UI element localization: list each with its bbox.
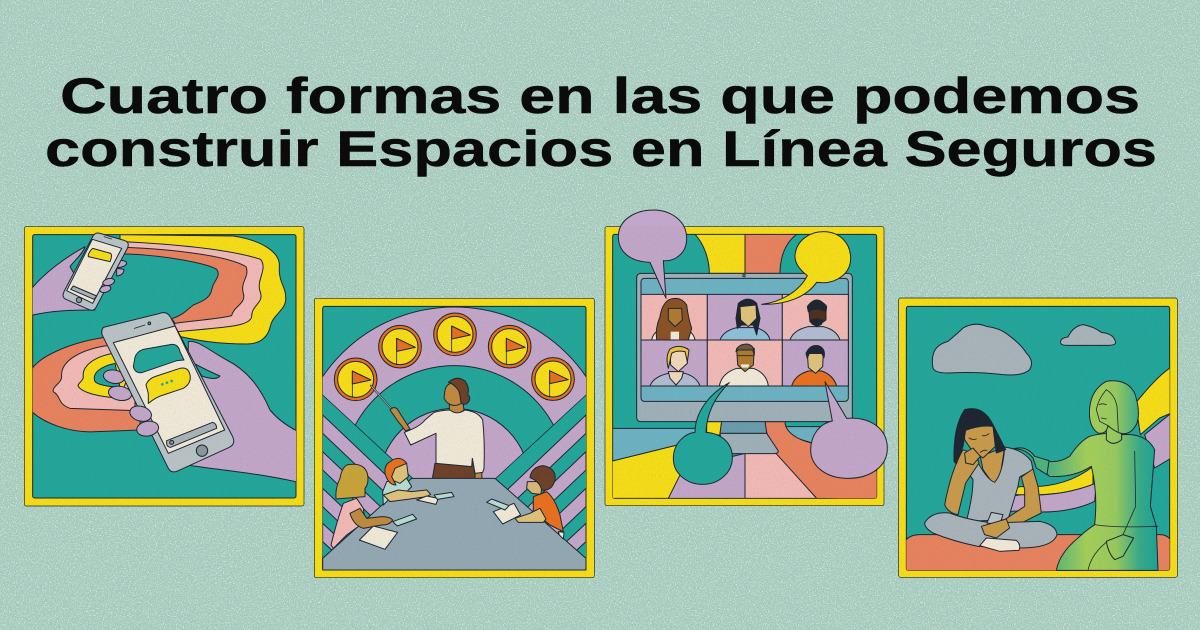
bottom pink segment [745, 452, 817, 498]
diagonal stripes right [496, 394, 586, 558]
table [323, 478, 586, 570]
ribbon: lower pink [53, 345, 135, 411]
title: construir Espacios en Línea Seguros [45, 121, 1157, 177]
panel: teacher with children and flags [314, 298, 595, 578]
phone: small [63, 233, 128, 310]
ribbon: upper yellow [120, 235, 286, 344]
video tile 2 [707, 294, 782, 340]
title: Cuatro formas en las que podemos [60, 68, 1140, 124]
panel texture overlay [24, 226, 1176, 578]
bottom right blue segment [786, 426, 820, 442]
video tile 5 [707, 340, 782, 386]
video tile 3 [782, 294, 848, 340]
hand: large [187, 341, 298, 482]
small hand fingers back [118, 260, 128, 268]
ribbon: lower yellow [78, 353, 127, 398]
bubble: purple bottom right [811, 382, 887, 478]
flag badge 3 [434, 313, 476, 356]
bottom orange path [765, 422, 878, 500]
ribbon: inner teal [94, 363, 120, 387]
ribbon: upper pink [123, 242, 263, 333]
papers and tablets [359, 492, 521, 549]
cloud large [932, 324, 1032, 375]
small fingers [117, 268, 124, 276]
top orange segment [745, 234, 797, 273]
person: translucent friend [1013, 381, 1158, 570]
arch: centre purple [385, 408, 524, 478]
panel: friend comforting a person [899, 298, 1177, 577]
ground [905, 535, 1171, 571]
bottom purple segment [668, 453, 745, 498]
big hand finger front [128, 404, 153, 424]
diagonal stripes left [322, 394, 413, 558]
ribbon: from phone purple [999, 483, 1096, 513]
title [45, 68, 1157, 177]
flag badge 4 [488, 325, 531, 368]
ribbon: right purple [1145, 413, 1171, 468]
panel: phones exchanging messages [24, 227, 304, 506]
bubble: yellow top right [762, 232, 851, 304]
top yellow segment [695, 234, 745, 273]
video tile 1 [641, 294, 707, 340]
flag badge 2 [379, 325, 421, 368]
ribbon: upper orange [125, 247, 247, 323]
teacher [371, 378, 484, 479]
arch: outer purple [322, 306, 586, 556]
teal inside upper ribbon [122, 254, 218, 326]
child: right boy [515, 466, 564, 539]
bottom yellow segments [612, 444, 680, 498]
arch: inner teal [355, 365, 554, 452]
panel: video call on a monitor [605, 210, 887, 506]
child: red-haired girl [383, 458, 431, 505]
person: sad seated [925, 409, 1057, 551]
big hand finger [107, 384, 133, 402]
bubble: purple top left [618, 210, 687, 298]
cloud small [1061, 325, 1116, 345]
video tile 6 [782, 340, 848, 386]
hand: small [30, 247, 95, 316]
notch between thumb and hand [195, 364, 220, 378]
flag badge 5 [532, 358, 574, 400]
bottom blue segment [612, 428, 695, 460]
bubble: teal bottom [673, 383, 732, 484]
flag badge 1 [334, 358, 377, 401]
ribbon: from phone yellow [992, 466, 1093, 512]
video tile 4 [641, 340, 707, 386]
monitor [637, 273, 852, 454]
small fingertip [99, 284, 112, 294]
ribbon: right yellow [1136, 367, 1171, 435]
small fingers front [102, 277, 115, 287]
big hand fingertip [136, 420, 160, 438]
big hand fingers back [102, 368, 126, 385]
ribbon: lower orange [30, 337, 140, 432]
phone: large [102, 313, 234, 472]
child: left girl [331, 464, 393, 548]
